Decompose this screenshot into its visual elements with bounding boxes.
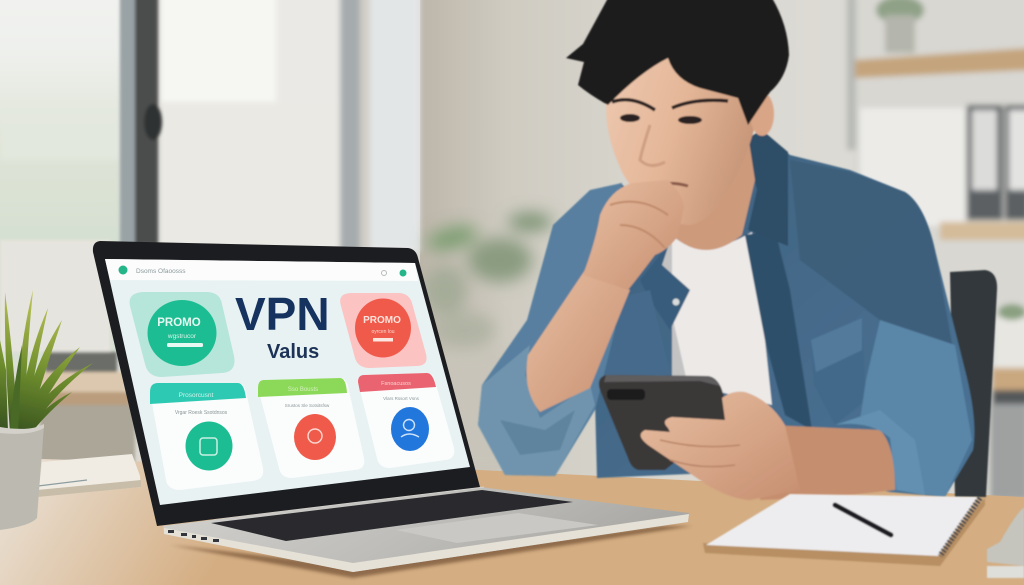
phone camera: [607, 389, 645, 400]
denim shirt: [565, 130, 974, 497]
face: [606, 50, 755, 225]
laptop screen: [105, 259, 470, 505]
screen header bar: [105, 259, 418, 281]
right sleeve upper shading: [860, 320, 972, 497]
open notebook with pen: [703, 494, 985, 566]
shirt placket and button: [745, 230, 812, 430]
white t-shirt: [672, 232, 772, 405]
pen: [835, 505, 891, 535]
promo tile: teal: wgstrucor: [167, 333, 197, 340]
keyboard: [211, 490, 573, 541]
person: [478, 0, 997, 500]
promo tile: red: oyrcen lou: [371, 329, 395, 335]
card: teal: Prosorcusnt: [179, 392, 214, 399]
heading: VPN: [235, 288, 330, 340]
heading: Valus: [267, 341, 319, 363]
left wall, sill and shelf behind plant: [0, 240, 135, 465]
hand on chin: [583, 180, 684, 290]
card: green: Srustos Sle Sotsitsfsw: [285, 403, 330, 408]
plant in pot: [0, 290, 141, 530]
laptop: [93, 241, 692, 578]
hand holding phone: [641, 392, 800, 500]
laptop base: [163, 487, 689, 572]
card: green: [258, 378, 364, 478]
eyes, brows, nose, mouth: [612, 100, 728, 186]
screen content: [105, 259, 454, 490]
right forearm: [760, 425, 895, 500]
neck: [668, 115, 755, 250]
laptop lid: [93, 241, 480, 526]
promo tile: red: PROMO: [363, 315, 401, 326]
card: red: [358, 373, 454, 468]
blurred background plant: [420, 213, 552, 475]
chair: [950, 270, 997, 497]
card: red: Fsnoacusos: [381, 381, 411, 387]
heading: [235, 288, 330, 363]
card: green: Sso Bousts: [288, 387, 318, 393]
forearm left: [526, 270, 630, 412]
card: teal: [150, 383, 263, 490]
small device at right edge: [987, 507, 1024, 578]
trackpad: [396, 513, 598, 543]
screen header bar: Dsoms Ofaoosss: [136, 268, 186, 275]
promo tile: red: [340, 293, 427, 368]
promo tile: teal: [130, 292, 234, 377]
promo tile: teal: PROMO: [157, 317, 201, 329]
plant blades: [0, 290, 93, 432]
ports: [168, 530, 219, 542]
pot: [0, 424, 44, 530]
card: teal: Vrgar Roesk Ssotdnsos: [175, 410, 228, 416]
desk: [0, 458, 1024, 585]
shirt pocket: [811, 318, 866, 425]
card: red: Vlars Rssort Vsns: [383, 396, 420, 401]
left notebook: [37, 454, 141, 497]
ear: [750, 92, 774, 136]
phone: [599, 375, 730, 470]
left sleeve: [478, 183, 622, 476]
cuff of right sleeve: [835, 410, 925, 495]
hair: [566, 0, 789, 125]
shadow under laptop: [170, 526, 692, 578]
shelves and binders: [847, 0, 1024, 500]
spiral binding: [940, 498, 980, 556]
